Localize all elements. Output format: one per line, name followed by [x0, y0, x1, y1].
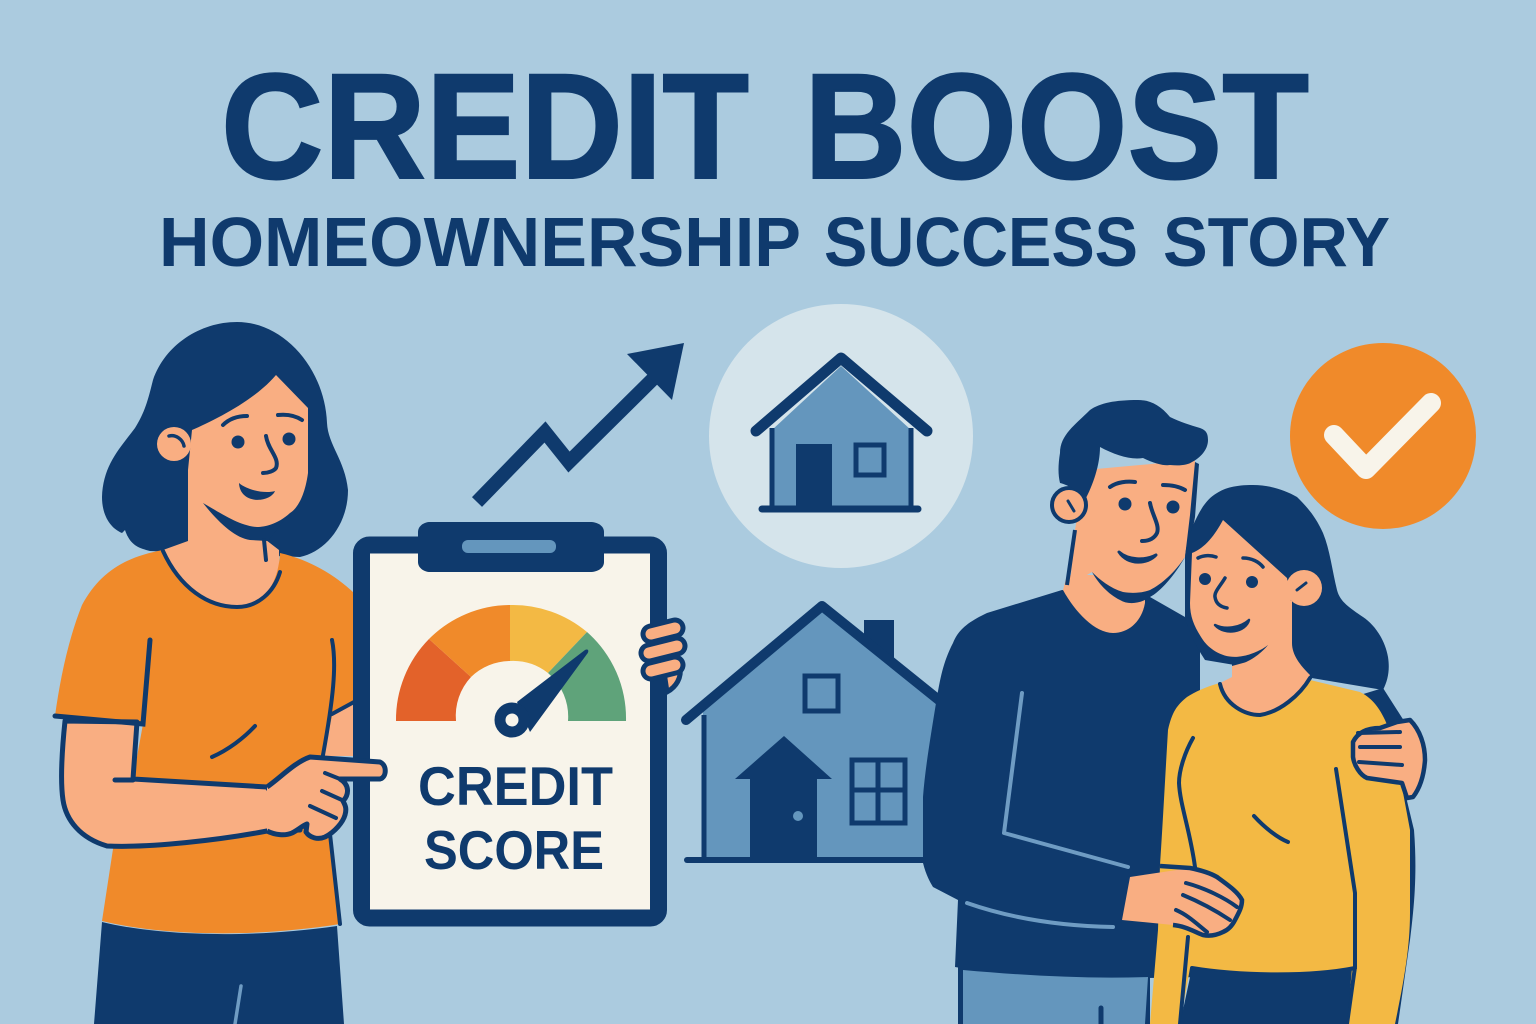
neck — [163, 470, 279, 607]
jeans — [958, 967, 1150, 1024]
arm — [62, 721, 300, 846]
far forearm — [323, 702, 356, 756]
title: CREDIT — [221, 42, 749, 210]
hair — [1185, 485, 1389, 690]
gauge — [396, 605, 626, 732]
figure: woman pointing — [55, 322, 356, 1024]
clipboard label — [418, 755, 613, 881]
figure: woman in yellow — [1122, 485, 1425, 1024]
face — [1070, 460, 1195, 601]
clipboard label: CREDIT — [418, 755, 613, 817]
face — [188, 375, 308, 527]
title: BOOST — [804, 42, 1309, 210]
pants — [94, 922, 344, 1024]
face outline and jaw — [1092, 462, 1199, 603]
subtitle — [159, 203, 1390, 281]
man's hand on shoulder — [1353, 720, 1425, 798]
icon: rising arrow — [477, 343, 684, 502]
yellow sweater — [1150, 680, 1410, 1024]
facial features — [1198, 556, 1263, 631]
subtitle: SUCCESS — [824, 203, 1138, 281]
ear — [157, 427, 191, 461]
shirt lines — [163, 551, 354, 924]
clipboard clip — [418, 522, 604, 572]
neck — [1063, 575, 1145, 633]
hand holding clipboard — [649, 628, 680, 692]
pointing hand — [267, 757, 385, 838]
hair — [102, 322, 348, 557]
navy outline of right arm — [1385, 720, 1415, 1024]
orange t-shirt — [55, 550, 354, 933]
facial features — [1110, 482, 1185, 562]
ear — [1286, 570, 1322, 606]
subtitle: STORY — [1163, 203, 1390, 281]
title — [221, 42, 1309, 210]
icon: large house — [686, 606, 945, 860]
hair — [1058, 400, 1208, 500]
icon: house in circle — [709, 304, 973, 568]
jaw shadow — [1232, 645, 1268, 666]
sweater lines — [1179, 678, 1355, 1024]
sleeve edge — [55, 640, 150, 724]
man's hand on waist — [1122, 866, 1242, 936]
facial features — [223, 415, 302, 500]
ear — [1052, 488, 1086, 522]
face — [1190, 520, 1292, 657]
sweater seams — [967, 693, 1128, 927]
subtitle: HOMEOWNERSHIP — [159, 203, 801, 281]
pants — [1180, 968, 1352, 1024]
sweater — [923, 590, 1200, 978]
clipboard — [362, 522, 658, 918]
figure: man — [923, 400, 1208, 1024]
neck — [1220, 600, 1310, 715]
clipboard label: SCORE — [424, 819, 604, 881]
icon: orange check badge — [1290, 343, 1476, 529]
jaw shadow — [203, 500, 300, 541]
